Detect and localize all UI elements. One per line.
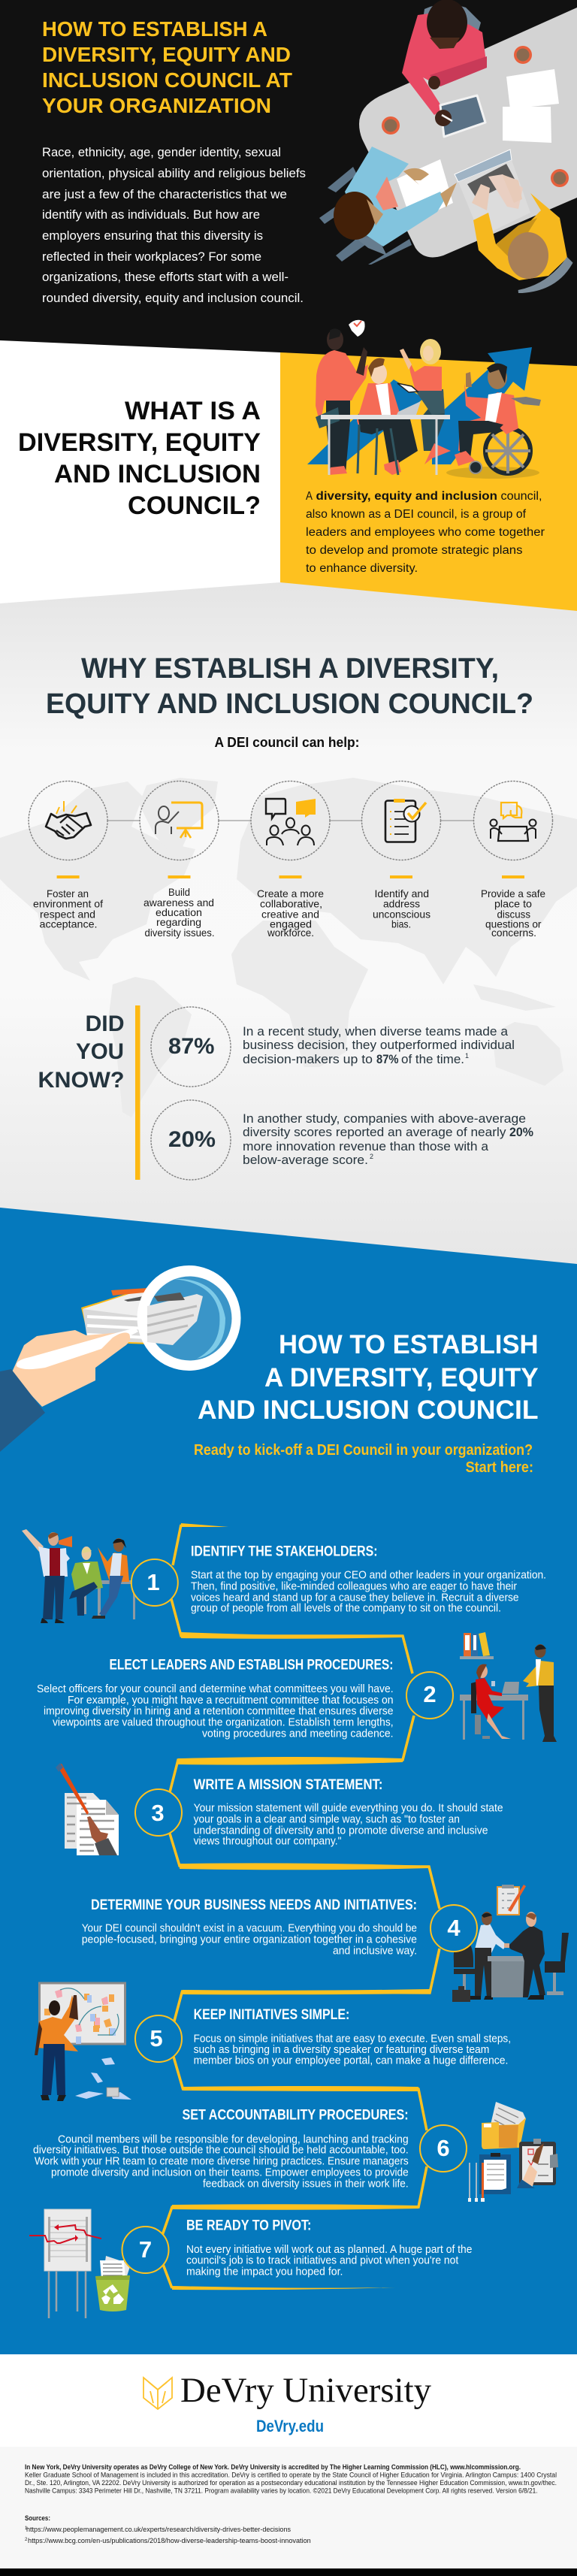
step 2 text: viewpoints are valued throughout the organization. Establish term lengths, <box>53 1717 394 1729</box>
panel: how-to blue background <box>0 1208 577 2354</box>
intro text block: identify with as individuals. But how are <box>42 208 260 222</box>
benefit 4: unconscious bias: address <box>383 897 420 909</box>
step 7 illustration: flip chart and recycling bin <box>29 2209 131 2318</box>
step 4 circle and number: 4 <box>447 1915 461 1941</box>
text: DEI council definition: to develop and promote strategic plans <box>306 544 523 557</box>
legal text: In New York, DeVry University operates as DeVry College of New York. DeVry University is accredited by The Higher Learning Commission (HLC), www.hlcommission.org. <box>25 2463 521 2471</box>
intro text block <box>42 146 306 305</box>
step 6 text: Council members will be responsible for developing, launching and tracking <box>58 2134 409 2146</box>
sources: 2 <box>25 2538 28 2542</box>
step 2 text: improving diversity in hiring and a retention committee that ensures diverse <box>44 1706 394 1718</box>
step 2 text: ELECT LEADERS AND ESTABLISH PROCEDURES: <box>110 1658 394 1673</box>
benefit 4: unconscious bias: unconscious <box>373 908 430 920</box>
step 1 text: Start at the top by engaging your CEO and other leaders in your organization. <box>191 1570 546 1582</box>
step 1 illustration: stakeholders <box>22 1529 135 1623</box>
step 3 text <box>194 1777 503 1847</box>
intro text block: are just a few of the characteristics that we <box>42 188 287 201</box>
panel: grey why-section background <box>0 571 577 1270</box>
illustration: meeting table from above <box>319 0 577 292</box>
step 2 illustration: elect leaders <box>460 1632 557 1742</box>
intro text block: reflected in their workplaces? For some <box>42 250 261 264</box>
benefit 5: safe place to discuss: concerns. <box>491 927 536 939</box>
text: DEI council definition: diversity, equity and inclusion <box>316 490 497 503</box>
statistic: 87%: business decision, they outperformed individual <box>243 1038 515 1052</box>
benefit 2: awareness and education <box>140 782 219 939</box>
statistic: 20%: 20% <box>509 1125 533 1139</box>
statistic: 20%: In another study, companies with above-average <box>243 1111 526 1126</box>
benefit 4: unconscious bias: bias. <box>391 918 411 930</box>
logo: DeVry University wordmark: DeVry University <box>180 2371 431 2410</box>
intro text block: Race, ethnicity, age, gender identity, sexual <box>42 146 281 159</box>
panel: what is a council white <box>0 340 280 603</box>
step 2 text: voting procedures and meeting cadence. <box>202 1728 394 1740</box>
step 4 text: people-focused, bringing your entire organization together in a cohesive <box>82 1934 417 1946</box>
sources: 1 <box>25 2526 28 2531</box>
benefit 2: awareness and education: regarding <box>156 916 201 928</box>
step 2 circle and number <box>406 1672 453 1719</box>
benefit 1: respect and acceptance: environment of <box>33 897 103 909</box>
benefit 1: respect and acceptance <box>29 782 107 930</box>
step 1 circle and number <box>131 1559 178 1606</box>
step 7 text: council's job is to track initiatives and pivot when you're not <box>186 2255 458 2267</box>
heading: how to establish: A DIVERSITY, EQUITY <box>264 1363 539 1392</box>
step 3 text: WRITE A MISSION STATEMENT: <box>194 1777 382 1793</box>
intro text block: organizations, these efforts start with a well- <box>42 271 288 284</box>
benefit 5: safe place to discuss: discuss <box>497 908 530 920</box>
statistic: 87%: 1 <box>465 1052 469 1060</box>
sources: https://www.bcg.com/en-us/publications/2018/how-diverse-leadership-teams-boost-innovation <box>28 2537 311 2544</box>
title: DIVERSITY, EQUITY AND <box>42 43 291 66</box>
benefit 2: awareness and education: education <box>156 906 202 918</box>
step 6 illustration: folders and clipboards <box>468 2102 558 2202</box>
benefit 5: safe place to discuss <box>473 782 553 939</box>
step 5 text <box>194 2007 511 2067</box>
text: DEI council definition: to enhance diversity. <box>306 562 418 575</box>
step 7 text: BE READY TO PIVOT: <box>186 2218 311 2234</box>
heading: what is a council: DIVERSITY, EQUITY <box>18 428 261 457</box>
statistic: 20%: diversity scores reported an average of nearly <box>243 1125 506 1139</box>
text: DEI council definition: A <box>306 490 313 503</box>
step 6 circle and number: 6 <box>437 2135 450 2161</box>
step 6 text: SET ACCOUNTABILITY PROCEDURES: <box>182 2108 409 2124</box>
subheading: a DEI council can help: A DEI council can help: <box>215 735 359 750</box>
statistic: 87%: decision-makers up to <box>243 1052 373 1066</box>
benefit 1: respect and acceptance: Foster an <box>47 887 89 899</box>
benefit 5: safe place to discuss: place to <box>494 897 532 909</box>
benefit 2: awareness and education: Build <box>168 886 190 898</box>
title <box>42 17 292 117</box>
world map background <box>0 778 577 1117</box>
call to action: start here <box>194 1442 533 1476</box>
panel: hero dark background <box>0 0 577 376</box>
connector: winding yellow path <box>162 1523 440 2290</box>
heading: how to establish: AND INCLUSION COUNCIL <box>198 1395 539 1425</box>
heading: what is a council: AND INCLUSION <box>54 460 261 488</box>
step 3 illustration: mission statement <box>56 1763 119 1855</box>
statistic: 87%: In a recent study, when diverse teams made a <box>243 1024 509 1039</box>
step 3 text: views throughout our company." <box>194 1835 342 1847</box>
panel: what is a council yellow <box>280 352 577 611</box>
heading: what is a council <box>18 397 261 520</box>
intro text block: employers ensuring that this diversity is <box>42 229 263 243</box>
step 4 illustration: handshake at desk <box>452 1885 569 2002</box>
benefit 3: collaborative workforce: collaborative, <box>260 897 322 909</box>
benefit 5: safe place to discuss: questions or <box>485 918 542 930</box>
step 3 circle and number <box>135 1789 182 1836</box>
statistic: 87%: 87% <box>168 1034 215 1059</box>
sources: Sources: <box>25 2514 50 2522</box>
panel: legal footer <box>0 2447 577 2568</box>
step 6 text: diversity initiatives. But those outside the council should be held accountable, too. <box>33 2145 409 2157</box>
step 5 circle and number: 5 <box>150 2025 163 2051</box>
step 5 illustration: planning board <box>35 1983 131 2101</box>
step 2 text: Select officers for your council and determine what committees you will have. <box>37 1683 394 1695</box>
step 7 text <box>186 2218 472 2278</box>
intro text block: rounded diversity, equity and inclusion council. <box>42 292 304 305</box>
intro text block: orientation, physical ability and religious beliefs <box>42 167 306 180</box>
legal text <box>25 2463 557 2495</box>
benefit 3: collaborative workforce: engaged <box>270 918 312 930</box>
benefit 3: collaborative workforce: workforce. <box>267 927 314 939</box>
panel: logo footer white <box>0 2354 577 2447</box>
text: DEI council definition: also known as a DEI council, is a group of <box>306 508 527 521</box>
title: YOUR ORGANIZATION <box>42 94 271 117</box>
link: DeVry.edu: DeVry.edu <box>256 2417 324 2435</box>
step 7 circle and number <box>122 2227 168 2273</box>
step 5 text: such as bringing in a diversity speaker or featuring diverse team <box>194 2044 489 2056</box>
illustration: diverse team at table <box>307 320 541 479</box>
step 1 text <box>191 1544 546 1615</box>
statistic: 20% <box>151 1100 533 1180</box>
heading: how to establish <box>198 1330 539 1425</box>
step 1 text: IDENTIFY THE STAKEHOLDERS: <box>191 1544 377 1560</box>
step 4 text: Your DEI council shouldn't exist in a vacuum. Everything you do should be <box>82 1923 417 1935</box>
statistic: 20%: 2 <box>370 1153 373 1160</box>
step 2 text <box>37 1658 394 1740</box>
title: INCLUSION COUNCIL AT <box>42 68 292 92</box>
heading: did you know <box>38 1011 125 1093</box>
step 4 circle and number <box>430 1905 477 1952</box>
heading: why establish: EQUITY AND INCLUSION COUNCIL? <box>46 688 533 720</box>
step 3 text: your goals in a clear and simple way, such as "to foster an <box>194 1814 460 1826</box>
step 6 circle and number <box>420 2125 467 2172</box>
step 5 circle and number <box>135 2015 182 2062</box>
text: DEI council definition: leaders and employees who come together <box>306 526 545 539</box>
step 5 text: KEEP INITIATIVES SIMPLE: <box>194 2007 349 2023</box>
statistic: 87%: 87% <box>376 1052 398 1066</box>
benefit 3: collaborative workforce: Create a more <box>257 887 324 899</box>
heading: did you know: KNOW? <box>38 1068 125 1093</box>
step 3 text: Your mission statement will guide everything you do. It should state <box>194 1803 503 1815</box>
benefit 2: awareness and education: awareness and <box>143 896 214 909</box>
step 1 text: group of people from all levels of the company to sit on the council. <box>191 1603 501 1615</box>
call to action: start here: Start here: <box>466 1459 533 1476</box>
benefit 2: awareness and education: diversity issues. <box>144 927 215 939</box>
step 4 text <box>82 1897 417 1958</box>
connector lines between benefits <box>107 820 473 821</box>
step 5 text: member bios on your employee portal, can make a huge difference. <box>194 2055 508 2067</box>
benefit 4: unconscious bias: Identify and <box>374 887 429 899</box>
logo: DeVry shield <box>143 2378 172 2409</box>
heading: why establish: WHY ESTABLISH A DIVERSITY, <box>81 653 499 685</box>
heading: how to establish: HOW TO ESTABLISH <box>279 1330 539 1359</box>
statistic: 20%: more innovation revenue than those with a <box>243 1139 489 1153</box>
text: DEI council definition: council, <box>500 490 542 503</box>
step 4 text: DETERMINE YOUR BUSINESS NEEDS AND INITIATIVES: <box>91 1897 417 1913</box>
statistic: 20%: below-average score. <box>243 1153 368 1167</box>
text: DEI council definition <box>306 490 545 575</box>
sources: https://www.peoplemanagement.co.uk/experts/research/diversity-drives-better-decisions <box>26 2526 291 2533</box>
step 4 text: and inclusive way. <box>333 1946 417 1958</box>
step 6 text <box>33 2108 409 2191</box>
step 6 text: promote diversity and inclusion on their teams. Empower employees to provide <box>51 2167 409 2179</box>
illustration: hand with magnifying glass over documents <box>0 1265 240 1452</box>
benefit 5: safe place to discuss: Provide a safe <box>481 887 545 899</box>
statistic: 87% <box>151 1007 515 1087</box>
heading: why establish <box>46 653 533 720</box>
heading: what is a council: COUNCIL? <box>128 491 261 520</box>
bottom black bar <box>0 2568 577 2576</box>
call to action: start here: Ready to kick-off a DEI Council in your organization? <box>194 1442 533 1459</box>
benefit 3: collaborative workforce: creative and <box>261 908 319 920</box>
heading: did you know: YOU <box>76 1039 124 1064</box>
sources <box>25 2514 311 2544</box>
step 1 text: Then, find positive, like-minded colleagues who are eager to have their <box>191 1581 517 1593</box>
step 2 circle and number: 2 <box>423 1681 437 1707</box>
step 5 text: Focus on simple initiatives that are easy to execute. Even small steps, <box>194 2033 511 2045</box>
statistic: 20%: 20% <box>168 1127 216 1152</box>
statistic: 87%: of the time. <box>401 1052 464 1066</box>
step 6 text: Work with your HR team to create more diverse hiring practices. Ensure managers <box>35 2156 409 2168</box>
benefit 1: respect and acceptance: acceptance. <box>39 918 98 930</box>
benefit 1: respect and acceptance: respect and <box>40 908 95 920</box>
heading: did you know: DID <box>86 1011 125 1036</box>
step 7 text: making the impact you hoped for. <box>186 2266 343 2278</box>
step 6 text: feedback on diversity issues in their work life. <box>203 2178 409 2191</box>
step 1 circle and number: 1 <box>147 1569 160 1595</box>
title: HOW TO ESTABLISH A <box>42 17 267 41</box>
step 1 text: voices heard and stand up for a cause they believe in. Recruit a diverse <box>191 1592 519 1604</box>
step 3 circle and number: 3 <box>151 1800 165 1826</box>
step 3 text: understanding of diversity and to promote diverse and inclusive <box>194 1825 488 1837</box>
step 7 circle and number: 7 <box>139 2236 152 2263</box>
step 7 text: Not every initiative will work out as planned. A huge part of the <box>186 2244 472 2256</box>
heading: what is a council: WHAT IS A <box>125 397 261 425</box>
step 2 text: For example, you might have a recruitment committee that focuses on <box>68 1695 394 1707</box>
yellow divider bar <box>135 1005 140 1180</box>
benefit 4: unconscious bias <box>362 782 440 930</box>
benefit 3: collaborative workforce <box>251 782 330 939</box>
